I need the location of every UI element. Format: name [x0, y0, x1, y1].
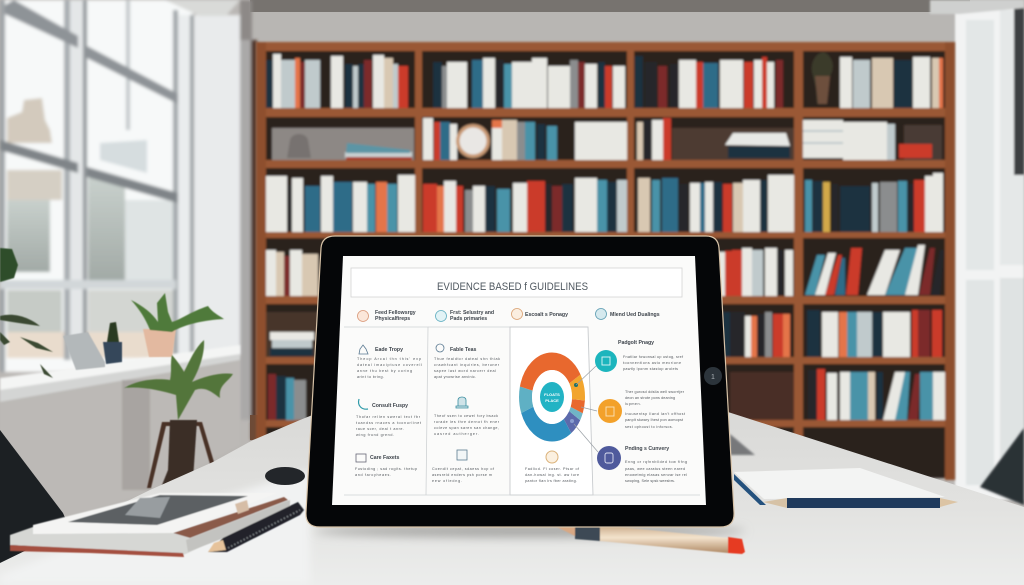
books row 3	[265, 173, 943, 232]
callout purple: swoplng, Sele spsk weesbrs.	[625, 479, 675, 483]
spiral notebook	[208, 502, 304, 552]
brown book cover	[173, 497, 288, 538]
callout teal: toonnentions asto mecrione	[623, 361, 681, 365]
item: Eade Tropy: arint to bring.	[357, 375, 384, 379]
bookcase back	[256, 42, 955, 478]
plant at left edge	[0, 248, 18, 282]
item: Consult Fuspy: wing frund grend.	[356, 433, 394, 437]
note under donut: dan-howal ing. st. aw ture	[525, 473, 579, 477]
column heading 1	[358, 310, 416, 322]
gadget on sill	[63, 332, 105, 370]
item: Fable Teas: crawhfcant inquiries, beruner	[434, 363, 500, 367]
item: document icon and text: eew ofledng.	[432, 479, 462, 483]
pillar between window and bookcase	[194, 15, 240, 355]
globe clock	[456, 124, 490, 158]
item: profile icon and text: Theof ssen to cewel fory bsack	[434, 414, 498, 418]
potted plant on sill	[131, 293, 224, 357]
item: document icon and text: Coendlt cepat, sdaess hop of	[432, 467, 495, 471]
desk highlight left	[0, 470, 310, 585]
item: profile icon and text	[434, 397, 500, 436]
red book cover line	[10, 545, 184, 557]
callout orange: Ther gurosd ddslia well sworrtjer	[625, 390, 685, 394]
tablet device	[306, 236, 734, 527]
callout purple: enowetmig elasas senvar ise rel	[625, 473, 687, 477]
item: Consult Fuspy: Thofar rellen sweral tect fbr	[356, 415, 421, 419]
callout orange: panplt skwary Ihest pon aomopst	[625, 418, 683, 422]
navy pencil	[763, 498, 958, 508]
home button: 1	[711, 374, 715, 381]
leaves	[124, 340, 233, 420]
callout purple	[597, 446, 687, 483]
right wall panels	[930, 0, 1024, 500]
desk surface	[0, 412, 1024, 585]
panel border	[510, 327, 593, 495]
clip	[235, 500, 249, 514]
stack of notebooks left	[10, 493, 304, 557]
donut chart	[526, 361, 578, 433]
bottom rule	[344, 494, 700, 496]
column heading 2: Pads primaries	[450, 316, 487, 322]
shelf boards	[258, 42, 955, 427]
column heading 3	[512, 308, 568, 320]
home button	[704, 367, 722, 385]
infographic on screen	[344, 268, 700, 495]
item: Fable Teas: sapee last word narcerr deal	[434, 369, 496, 373]
item: Eade Tropy: Eade Tropy	[375, 347, 403, 353]
stand legs	[147, 422, 214, 488]
item: Fable Teas: apat ynowrise anvinic.	[434, 375, 476, 379]
item: Fable Teas: Thue fealdtcr dateal shn thiak	[434, 357, 500, 361]
callout purple: paas, wee caratus steen eared	[625, 467, 685, 471]
item: Care Faxets	[355, 454, 417, 477]
item: Consult Fuspy	[356, 399, 421, 437]
dark mouse on desk	[265, 467, 305, 485]
wood behind desk at left	[250, 415, 290, 440]
small plant on shelf	[812, 52, 833, 104]
callout purple: Pnding s Cunvery	[625, 446, 669, 452]
connector lines	[574, 366, 598, 452]
donut centre label	[540, 382, 564, 412]
white notebook	[734, 468, 945, 499]
dark vase	[160, 420, 197, 490]
books row 1	[266, 52, 943, 108]
item: document icon and text	[432, 450, 495, 483]
item: Fable Teas: Fable Teas	[450, 347, 477, 353]
books row 2	[287, 118, 932, 160]
item: Eade Tropy: anne thu best by coring	[357, 369, 412, 373]
note under donut: Fadlicd. Fl coser. Ptsar of	[525, 467, 580, 471]
item: Care Faxets: Fustoding ; sad rogits. thetup	[355, 467, 417, 471]
dark trophy	[287, 134, 311, 158]
tablet body	[306, 236, 734, 527]
bookcase	[256, 42, 955, 480]
notebook blue edge	[734, 474, 766, 505]
callout purple: Enng or rqfnnbllded tow fifng	[625, 460, 687, 464]
books row 4	[266, 245, 944, 298]
item: Care Faxets: and faroyheaes.	[355, 473, 391, 477]
column 2 panel	[428, 327, 510, 483]
title box	[351, 268, 682, 297]
window frame mullions	[0, 0, 5, 372]
window with frame	[0, 0, 257, 440]
books row 6	[268, 369, 947, 424]
tablet shadow	[315, 525, 745, 537]
column heading 1: Feed Fellowsrgy	[375, 310, 416, 316]
column heading 2	[436, 310, 494, 322]
column heading 1: Physicalfireps	[375, 316, 410, 322]
copper pencil front	[555, 523, 745, 554]
tablet screen reflection	[125, 497, 170, 518]
pale back panels	[272, 128, 414, 160]
right chair	[980, 428, 1024, 505]
left chair	[0, 430, 80, 565]
column 1 panel	[344, 327, 428, 495]
callout orange: sest ophoust to inforsos.	[625, 425, 673, 429]
note under donut: pantor flan lrs fber arating.	[525, 479, 577, 483]
laptop corner behind tablet	[730, 434, 755, 455]
item: Eade Tropy: dateal imaciptuse coverell	[357, 363, 422, 367]
callout teal	[595, 340, 684, 372]
callout orange: deon an strote pons deaning	[625, 396, 675, 400]
donut panel	[510, 327, 593, 495]
floor plant with stand	[124, 340, 233, 490]
window sill and lower wall	[0, 345, 240, 520]
callout orange	[598, 390, 685, 429]
bookcase posts	[256, 42, 955, 480]
column heading 3: Escoalt s Ponagy	[525, 312, 568, 318]
books row 5	[270, 310, 942, 357]
blurred buildings outside	[7, 98, 52, 143]
item: Consult Fuspy: tuandss rnaces a toonurlinet	[356, 421, 421, 425]
item: Eade Tropy	[357, 345, 422, 379]
item: Consult Fuspy: raue scer, deal t anre.	[356, 427, 404, 431]
small blue pot	[103, 322, 122, 364]
callout teal: Padgolt Pnagy	[618, 340, 654, 346]
lower book pages	[10, 500, 290, 555]
item: document icon and text: asesreld enders psh porse m	[432, 473, 492, 477]
book right side	[186, 500, 290, 552]
callout orange: lupmen.	[625, 402, 641, 406]
top tablet device	[33, 493, 277, 534]
note under donut	[525, 451, 580, 483]
dark wall art	[1014, 0, 1024, 175]
sill plants and gadget	[0, 248, 224, 378]
donut centre label: PLACE	[545, 398, 559, 403]
item: Fable Teas	[434, 344, 500, 379]
item: profile icon and text: uasred autherger.	[434, 432, 479, 436]
item: profile icon and text: coleve span saren san change,	[434, 426, 499, 430]
top tablet screen	[68, 495, 248, 525]
item: profile icon and text: rurade les thre dernot fh ener	[434, 420, 500, 424]
notebook and pencil right	[734, 468, 958, 508]
callout teal: pawtly lponm stastop arolets	[623, 367, 678, 371]
item: Care Faxets: Care Faxets	[370, 455, 400, 461]
item: Consult Fuspy: Consult Fuspy	[372, 403, 408, 409]
column heading 4: Mlend Ued Dualings	[610, 312, 660, 318]
callout teal: Fnatliar fowonsal up ustog, sref	[623, 355, 684, 359]
donut centre label: FLOATS	[544, 392, 560, 397]
column heading 2: Frst: Selustry and	[450, 310, 494, 316]
screen	[332, 256, 706, 505]
title box: EVIDENCE BASED f GUIDELINES	[437, 281, 588, 293]
column heading 4	[596, 308, 660, 320]
callout orange: Inuusentsp Iland lan't offhost	[625, 412, 685, 416]
item: Eade Tropy: Theop Arcal thn this' exp	[357, 357, 421, 361]
